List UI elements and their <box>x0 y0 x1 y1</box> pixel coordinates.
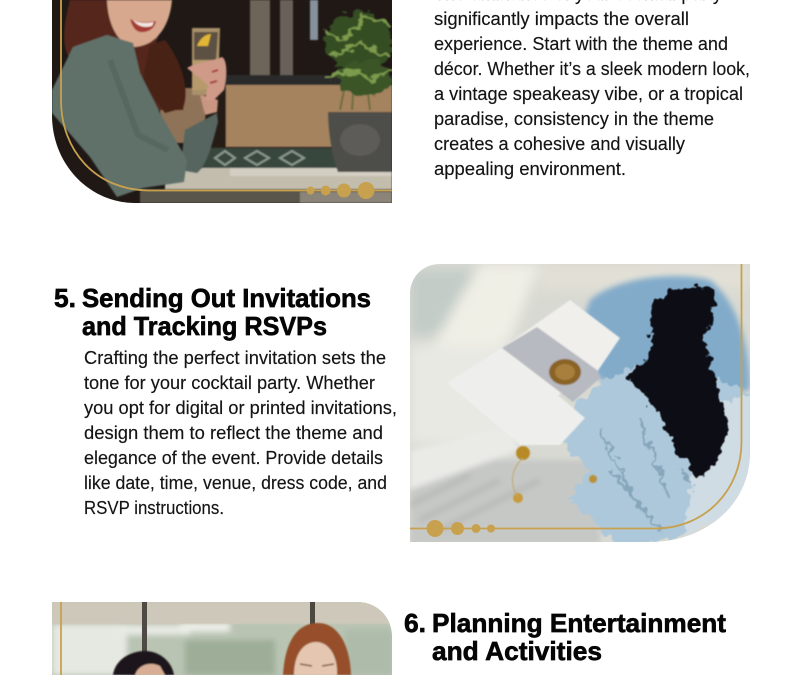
text block: section 5 body: elegance of the event. Provide details <box>84 448 383 468</box>
gold frame line <box>60 602 62 675</box>
text block: section 4 body: creates a cohesive and visually <box>434 134 685 154</box>
text block: section 5 body: you opt for digital or printed invitations, <box>84 398 397 418</box>
gold frame line with dots <box>61 0 392 199</box>
text block: section 4 body: experience. Start with the theme and <box>434 34 728 54</box>
text block: section 4 body <box>434 0 750 179</box>
text block: section 4 body: paradise, consistency in the theme <box>434 109 714 129</box>
text block: section 4 body: significantly impacts the overall <box>434 9 689 29</box>
heading: section 6: and Activities <box>432 636 602 666</box>
text block: section 5 body: tone for your cocktail party. Whether <box>84 373 375 393</box>
photo panel: invitation with feathers <box>410 264 755 545</box>
heading: section 6: Planning Entertainment <box>432 608 726 638</box>
text block: section 5 body <box>84 348 397 518</box>
gold frame line with dots <box>410 264 742 537</box>
text block: section 4 body: a vintage speakeasy vibe, or a tropical <box>434 84 743 104</box>
heading: section 5: Sending Out Invitations <box>82 283 371 313</box>
text block: section 4 body: décor. Whether it’s a sleek modern look, <box>434 59 750 79</box>
text block: section 5 body: Crafting the perfect invitation sets the <box>84 348 386 368</box>
text block: section 5 body: RSVP instructions. <box>84 498 224 518</box>
heading: section 5: and Tracking RSVPs <box>82 311 327 341</box>
text block: section 5 body: like date, time, venue, dress code, and <box>84 473 387 493</box>
heading: section 6 <box>404 608 726 666</box>
heading: section 5: 5. <box>54 283 76 313</box>
photo panel: woman with cocktail <box>52 0 392 203</box>
text block: section 4 body: appealing environment. <box>434 159 626 179</box>
heading: section 5 <box>54 283 371 341</box>
photo panel: two women planning <box>52 602 392 675</box>
text block: section 5 body: design them to reflect the theme and <box>84 423 383 443</box>
heading: section 6: 6. <box>404 608 426 638</box>
